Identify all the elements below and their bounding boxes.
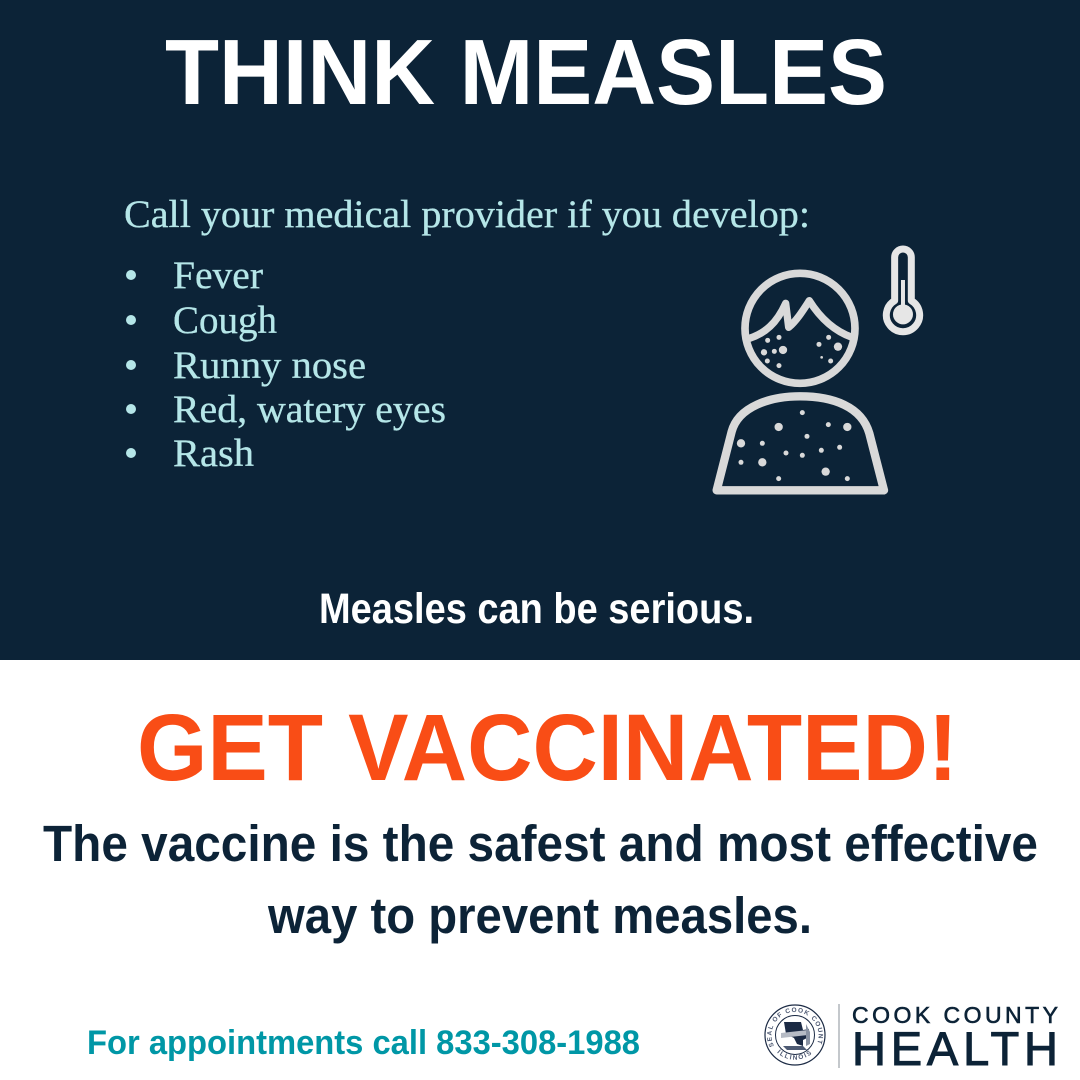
symptoms list: Red, watery eyes [173, 388, 446, 431]
icon: person with rash [717, 273, 884, 490]
symptoms list: Cough [173, 299, 277, 342]
text block: vaccine message: way to prevent measles. [267, 887, 812, 944]
symptoms list: Rash [173, 432, 254, 475]
text block: vaccine message [43, 815, 1038, 944]
heading: get vaccinated: GET VACCINATED! [137, 695, 958, 801]
panel: dark symptoms background [0, 0, 1080, 660]
symptoms list: Runny nose [173, 344, 366, 387]
title: THINK MEASLES [165, 20, 887, 124]
logo: Cook County Health wordmark: HEALTH [852, 1022, 1058, 1075]
icon: thermometer [886, 249, 920, 332]
symptoms list [126, 254, 446, 475]
logo: Cook County Health wordmark: COOK COUNTY [852, 1002, 1058, 1028]
text block: measles can be serious: Measles can be serious. [319, 585, 754, 633]
logo: Cook County seal: ILLINOIS [777, 1049, 812, 1060]
divider: logo [838, 1004, 840, 1068]
logo: Cook County seal: SEAL OF COOK COUNTY [767, 1008, 824, 1047]
text block: vaccine message: The vaccine is the safest and most effective [43, 815, 1038, 872]
symptoms list: Fever [173, 254, 263, 297]
text block: symptoms intro: Call your medical provider if you develop: [124, 193, 810, 236]
logo: Cook County seal [764, 1004, 826, 1066]
text block: appointment phone number: For appointments call 833-308-1988 [87, 1024, 640, 1062]
